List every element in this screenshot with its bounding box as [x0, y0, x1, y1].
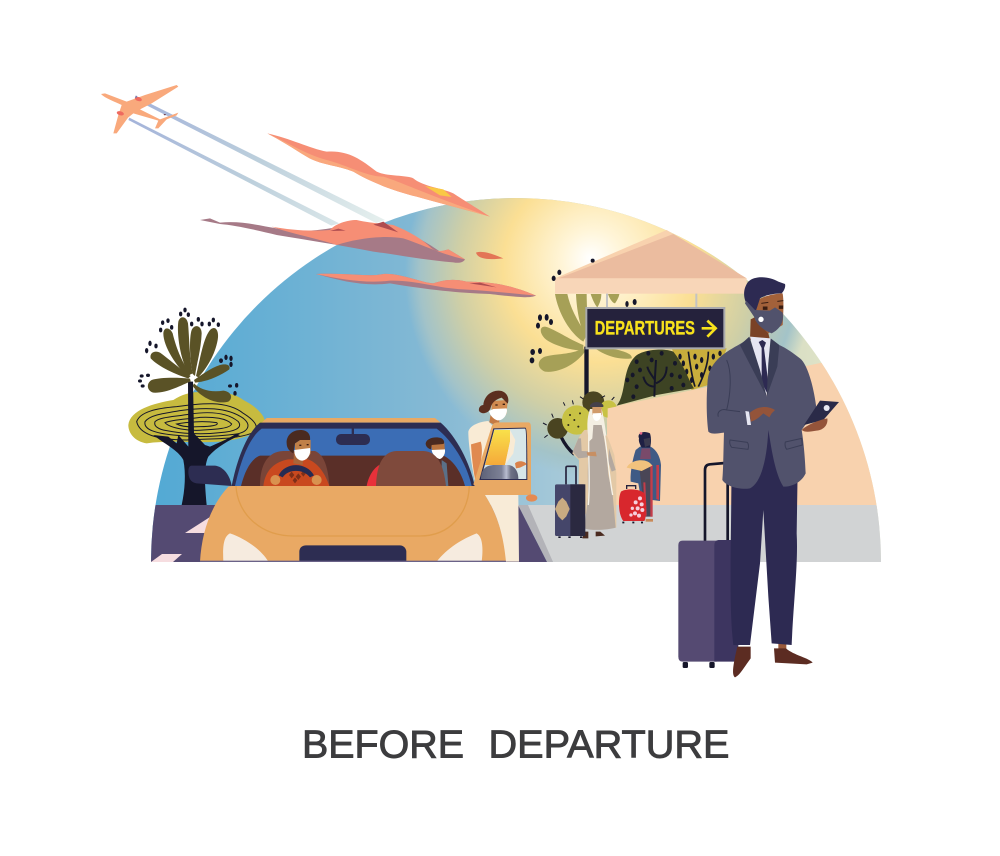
grille	[299, 545, 406, 562]
shirt	[750, 337, 771, 397]
sun glow	[408, 198, 802, 468]
sign poles	[606, 294, 697, 308]
patterned yellow shrub	[672, 348, 727, 390]
terminal building wall	[607, 362, 881, 510]
background palm	[530, 259, 637, 398]
trousers	[731, 427, 798, 645]
kerb	[518, 505, 553, 562]
icon: airplane	[101, 85, 178, 133]
car underside line	[200, 561, 507, 562]
road stripes	[151, 517, 210, 562]
cloud: lower	[316, 274, 536, 297]
suitcase: dark	[555, 466, 585, 538]
tree trunk	[153, 382, 240, 505]
left hand	[750, 407, 775, 422]
car roof	[262, 418, 441, 423]
sleeve folds	[718, 360, 740, 417]
woman hand	[526, 494, 537, 502]
phone camera	[824, 405, 830, 411]
illustration: before departure scene	[101, 85, 881, 758]
ankle	[778, 643, 786, 649]
tie	[759, 340, 768, 393]
suitcase handle	[705, 463, 728, 542]
head	[744, 277, 785, 340]
windshield frame	[232, 423, 475, 486]
traveller: businessman with suitcase	[678, 277, 839, 677]
road	[151, 505, 547, 562]
departures sign	[586, 308, 724, 348]
pavement	[525, 505, 881, 562]
tree seed dots	[138, 308, 238, 396]
hair	[744, 277, 785, 313]
woman skirt	[485, 495, 519, 562]
face mask	[745, 301, 783, 333]
car occupants	[260, 430, 448, 486]
panel: dome background	[151, 198, 881, 562]
clouds	[200, 133, 536, 297]
large suitcase	[678, 540, 738, 668]
car side mirror	[188, 466, 232, 486]
passenger seat	[376, 451, 446, 486]
title: BEFORE	[302, 724, 464, 766]
cloud: middle	[200, 218, 465, 263]
cloud: top	[267, 133, 490, 217]
car door	[473, 422, 531, 495]
airplane trails	[128, 103, 385, 226]
dark dotted shrub	[617, 350, 694, 406]
rear seats	[241, 456, 465, 486]
departures sign: DEPARTURES	[595, 318, 695, 339]
scene: terminal, sign and small travellers	[530, 230, 747, 406]
lapels	[740, 337, 779, 397]
terminal wall in front of shrubs	[608, 380, 745, 505]
shoes	[733, 647, 813, 677]
folding fan	[627, 460, 652, 471]
mask valve	[758, 317, 764, 322]
car hood	[200, 486, 507, 562]
phone hand	[802, 418, 827, 432]
child passenger	[367, 437, 448, 486]
cloud: small	[476, 252, 503, 259]
neck	[750, 317, 770, 340]
headlights	[223, 533, 482, 562]
tree bush canopy	[128, 392, 265, 443]
sky	[151, 198, 881, 562]
rear view mirror	[336, 428, 370, 445]
tree leaves	[148, 317, 231, 402]
title: DEPARTURE	[488, 724, 730, 766]
scene: left tree and car	[128, 308, 537, 562]
steering wheel	[279, 465, 314, 477]
face	[755, 293, 783, 333]
driver	[263, 430, 329, 486]
windshield glass	[235, 429, 472, 486]
cuff	[745, 411, 751, 425]
round shrubs	[543, 391, 617, 454]
scene: small travellers by the terminal	[543, 380, 745, 538]
jacket	[707, 338, 817, 489]
hood crease	[236, 486, 469, 536]
eyes and brows	[761, 301, 783, 309]
tent canopy	[555, 230, 747, 294]
traveller: woman in kimono	[627, 432, 661, 522]
driver seat	[260, 451, 329, 486]
suitcase: red with blossoms	[619, 486, 646, 523]
woman upper body	[468, 391, 515, 482]
jacket pockets	[730, 438, 802, 449]
traveller: arab man	[572, 402, 616, 538]
phone	[804, 401, 839, 425]
